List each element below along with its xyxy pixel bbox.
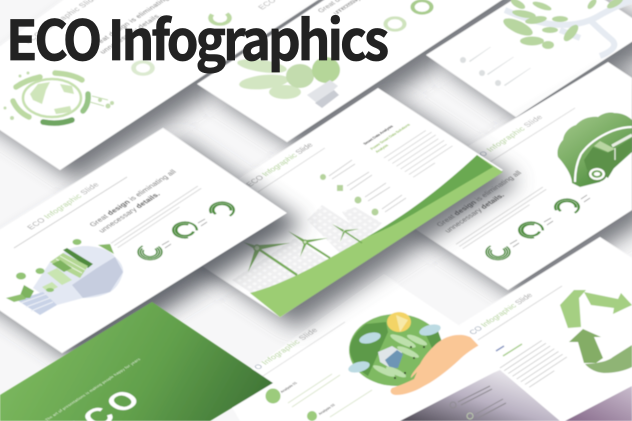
cover tagline: The art of presentations is making people happy for years xyxy=(44,358,141,421)
city buildings xyxy=(232,205,382,303)
body lines xyxy=(111,186,205,248)
purple shadow xyxy=(565,386,632,421)
lower slide list xyxy=(450,386,506,419)
subtitle line xyxy=(490,108,575,162)
body lines xyxy=(456,187,550,249)
icon: lightbulb with city xyxy=(6,239,123,315)
slide: lightbulb with leaves (top centre) xyxy=(197,0,536,153)
title underline xyxy=(14,177,127,248)
small headings xyxy=(496,346,504,351)
slide: car-tree (right) xyxy=(376,62,632,300)
subtitle line xyxy=(263,322,345,376)
headline: Great design is eliminating all xyxy=(87,168,178,228)
list items xyxy=(460,47,531,86)
turbine 2 xyxy=(288,231,330,258)
ring chart xyxy=(130,59,156,77)
turbine 3 xyxy=(332,224,362,243)
list: analysis 01 xyxy=(266,374,340,407)
slide: globe (top left) xyxy=(0,0,346,181)
list: analysis 01: Analysis 01 xyxy=(279,381,298,394)
subtitle line xyxy=(478,286,562,340)
slide title: O Infographic Slide xyxy=(477,113,545,158)
heading: smart data: Smart Data Analysis xyxy=(362,125,394,146)
list icons xyxy=(320,174,378,216)
slide title: O Infographic Slide xyxy=(252,326,320,371)
ring chart xyxy=(409,0,435,16)
headline line two: unnecessary details. xyxy=(96,191,162,234)
slide: wind turbines (centre) xyxy=(155,88,519,328)
ring labels xyxy=(510,195,590,247)
slide title: ECO Infographic Slide xyxy=(244,141,316,188)
tree trunk xyxy=(505,0,632,56)
slide title: CO Infographic Slide xyxy=(467,291,535,336)
planet xyxy=(347,312,443,386)
ring chart xyxy=(481,241,515,263)
ring chart xyxy=(508,215,554,245)
icon: recycle arrows xyxy=(560,290,632,373)
ring chart xyxy=(546,193,588,221)
green subheading xyxy=(503,344,522,356)
tree leaves xyxy=(501,0,625,49)
hand xyxy=(391,335,483,395)
paragraph lines xyxy=(384,129,457,177)
headline: Great design is eliminating all xyxy=(434,169,524,228)
ring chart xyxy=(162,215,208,245)
subtitle lines xyxy=(258,148,325,192)
green subheading: Power Smart Data Solutions xyxy=(369,123,411,151)
slide: hand and planet (bottom centre) xyxy=(222,275,540,421)
list text lines xyxy=(329,160,406,212)
slide: lightbulb city (left) xyxy=(0,128,303,364)
dark shadow on lower slide xyxy=(400,370,560,421)
globe with surrounding icons xyxy=(4,72,114,123)
list: analysis 02: Analysis 02 xyxy=(317,403,336,416)
slide: ECO cover (bottom left) xyxy=(0,302,273,421)
wave xyxy=(250,155,503,317)
list: analysis 02 xyxy=(307,390,372,421)
green subheading line two: Analysis xyxy=(374,144,390,154)
leaves xyxy=(236,57,340,99)
slide: tree (top right) xyxy=(426,0,632,128)
slide: recycle (bottom right) xyxy=(459,237,632,421)
bulb base xyxy=(307,80,339,108)
slide title: ECO Infographic Slide xyxy=(25,181,102,231)
ring chart xyxy=(382,15,408,33)
ring chart xyxy=(207,9,233,27)
ring chart xyxy=(201,196,243,224)
headline line two: unnecessary details. xyxy=(442,192,506,234)
ring chart xyxy=(133,241,171,263)
slide: globe (top left): unnecessary details. xyxy=(99,13,163,55)
turbine 1 xyxy=(243,242,297,275)
paragraph lines xyxy=(500,340,571,387)
icon: car in tree xyxy=(557,112,632,187)
